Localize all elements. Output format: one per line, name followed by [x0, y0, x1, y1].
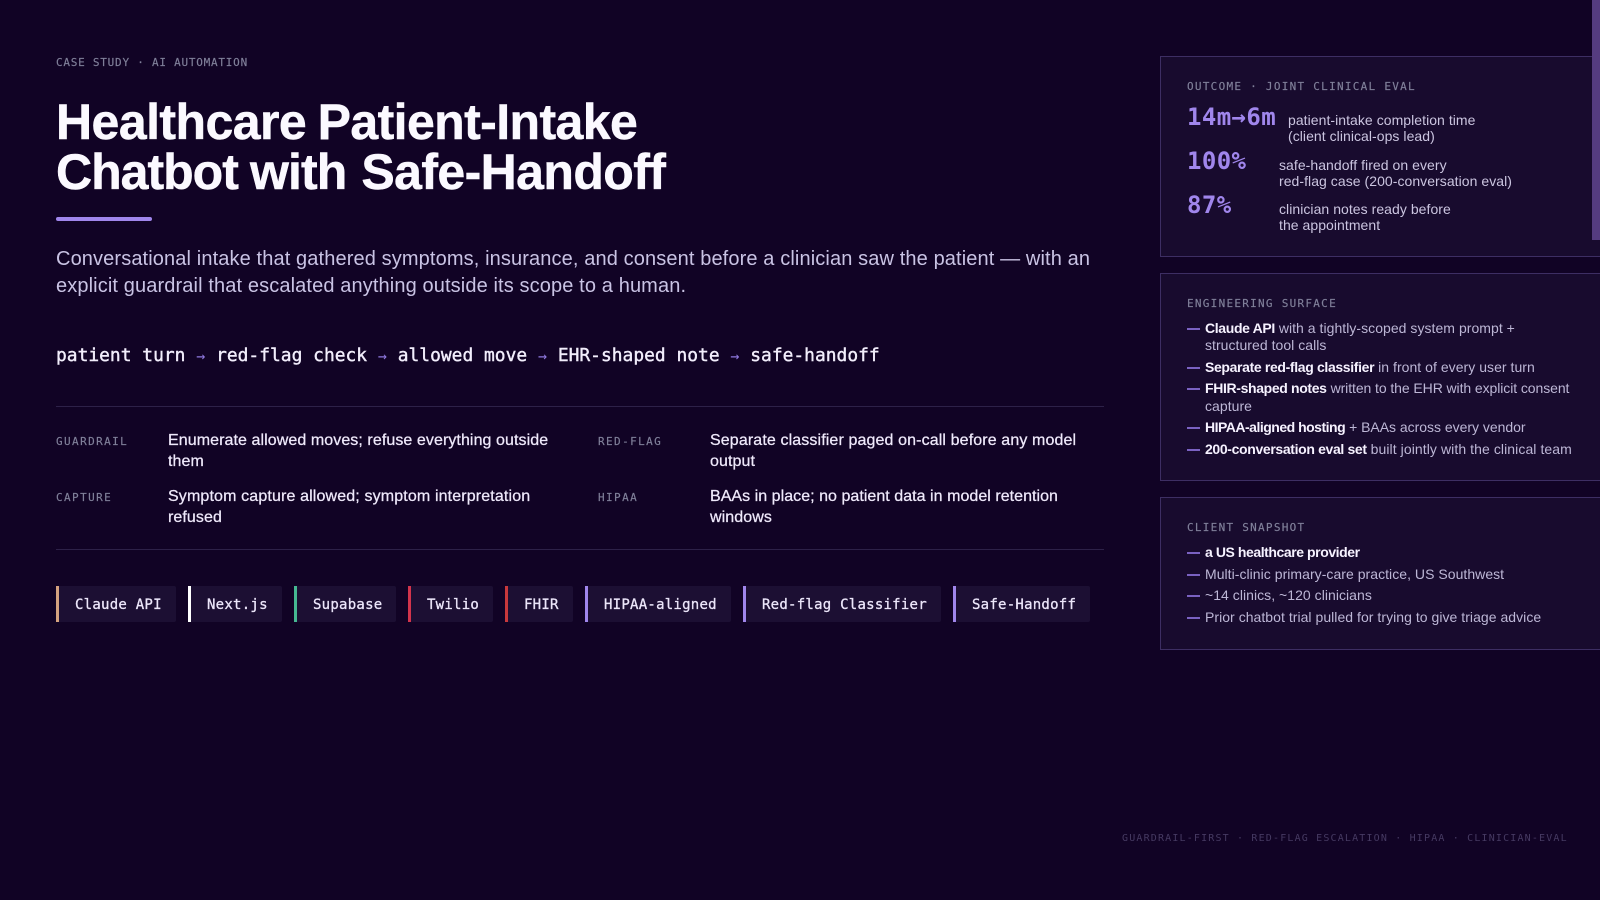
spec: hipaa: HIPAA — [598, 491, 638, 504]
footer tagline: GUARDRAIL-FIRST · RED-FLAG ESCALATION · HIPAA · CLINICIAN-EVAL — [1122, 833, 1568, 844]
bullet list: client: a US healthcare provider — [1205, 544, 1360, 560]
scrollbar accent strip — [1592, 0, 1600, 240]
tag: Claude API — [56, 586, 176, 622]
spec: guardrail: Enumerate allowed moves; refuse everything outside — [168, 432, 548, 449]
bullet list: engineering: 200-conversation eval set built jointly with the clinical team — [1205, 441, 1572, 457]
tag: Next.js: Next.js — [207, 597, 268, 613]
spec: guardrail — [56, 432, 548, 470]
title — [56, 94, 666, 200]
spec grid — [56, 432, 1076, 526]
flow: process steps: patient turn → red-flag check → allowed move → EHR-shaped note → safe-handoff — [56, 345, 880, 366]
subtitle — [56, 248, 1090, 297]
bullet list: engineering: Separate red-flag classifier in front of every user turn — [1205, 359, 1535, 375]
metric: 87% — [1187, 191, 1451, 233]
tag: Twilio: Twilio — [427, 597, 479, 613]
divider bottom — [56, 549, 1104, 550]
tag: Safe-Handoff: Safe-Handoff — [972, 597, 1076, 613]
title: Chatbot with Safe-Handoff — [56, 144, 665, 200]
tag: Red-flag Classifier: Red-flag Classifier — [762, 597, 927, 613]
bullet list: engineering: Claude API with a tightly-scoped system prompt + — [1205, 320, 1515, 336]
spec: guardrail: GUARDRAIL — [56, 435, 128, 448]
metric: 14m to 6m: 14m→6m — [1187, 103, 1276, 131]
panel: engineering surface — [1160, 273, 1600, 481]
spec: capture: refused — [168, 509, 222, 526]
bullet list: client — [1187, 544, 1541, 625]
metric: 100% — [1187, 147, 1512, 189]
spec: capture: Symptom capture allowed; symptom interpretation — [168, 488, 530, 505]
tag: Claude API: Claude API — [75, 597, 162, 613]
title: Healthcare Patient-Intake — [56, 94, 637, 150]
bullet list: engineering: structured tool calls — [1205, 337, 1326, 353]
tag: FHIR — [505, 586, 573, 622]
accent bar — [56, 217, 152, 221]
tag: FHIR: FHIR — [524, 597, 559, 613]
panel heading: client: CLIENT SNAPSHOT — [1187, 521, 1305, 534]
panel: outcome — [1160, 56, 1600, 257]
eyebrow: CASE STUDY · AI AUTOMATION — [56, 56, 248, 69]
tag: HIPAA-aligned — [585, 586, 731, 622]
tag: Safe-Handoff — [953, 586, 1090, 622]
panel: client snapshot — [1160, 497, 1600, 650]
tag: HIPAA-aligned: HIPAA-aligned — [604, 597, 717, 613]
bullet list: client: Multi-clinic primary-care practice, US Southwest — [1205, 566, 1504, 582]
subtitle: explicit guardrail that escalated anything outside its scope to a human. — [56, 275, 686, 297]
panel heading: engineering: ENGINEERING SURFACE — [1187, 297, 1337, 310]
spec: red-flag: RED-FLAG — [598, 435, 662, 448]
tag: Twilio — [408, 586, 493, 622]
tag: Red-flag Classifier — [743, 586, 941, 622]
spec: capture — [56, 488, 530, 526]
bullet list: engineering: capture — [1205, 398, 1252, 414]
spec: red-flag: output — [710, 453, 755, 470]
tag: Supabase — [294, 586, 396, 622]
spec: hipaa — [598, 488, 1058, 526]
tech tags — [56, 586, 1090, 622]
metric: 100%: safe-handoff fired on every — [1279, 157, 1447, 173]
bullet list: engineering: FHIR-shaped notes written to the EHR with explicit consent — [1205, 380, 1569, 396]
tag: Supabase: Supabase — [313, 597, 382, 613]
bullet list: client: ~14 clinics, ~120 clinicians — [1205, 587, 1372, 603]
metric: 87%: 87% — [1187, 191, 1232, 219]
spec: hipaa: BAAs in place; no patient data in model retention — [710, 488, 1058, 505]
subtitle: Conversational intake that gathered symptoms, insurance, and consent before a clinician saw the patient — with an — [56, 248, 1090, 270]
spec: hipaa: windows — [710, 509, 772, 526]
metric: 87%: clinician notes ready before — [1279, 201, 1451, 217]
spec: red-flag: Separate classifier paged on-call before any model — [710, 432, 1076, 449]
bullet list: engineering: HIPAA-aligned hosting + BAAs across every vendor — [1205, 419, 1526, 435]
spec: capture: CAPTURE — [56, 491, 112, 504]
metric: 14m to 6m: patient-intake completion time — [1288, 112, 1476, 128]
metric: 87%: the appointment — [1279, 217, 1380, 233]
metric: 14m to 6m — [1187, 103, 1476, 144]
divider top — [56, 406, 1104, 407]
panel heading: outcome: OUTCOME · JOINT CLINICAL EVAL — [1187, 80, 1416, 93]
metric: 100%: 100% — [1187, 147, 1246, 175]
bullet list: client: Prior chatbot trial pulled for trying to give triage advice — [1205, 609, 1541, 625]
metric: 14m to 6m: (client clinical-ops lead) — [1288, 128, 1435, 144]
spec: guardrail: them — [168, 453, 204, 470]
metric: 100%: red-flag case (200-conversation eval) — [1279, 173, 1512, 189]
tag: Next.js — [188, 586, 282, 622]
spec: red-flag — [598, 432, 1076, 470]
bullet list: engineering — [1187, 320, 1572, 457]
